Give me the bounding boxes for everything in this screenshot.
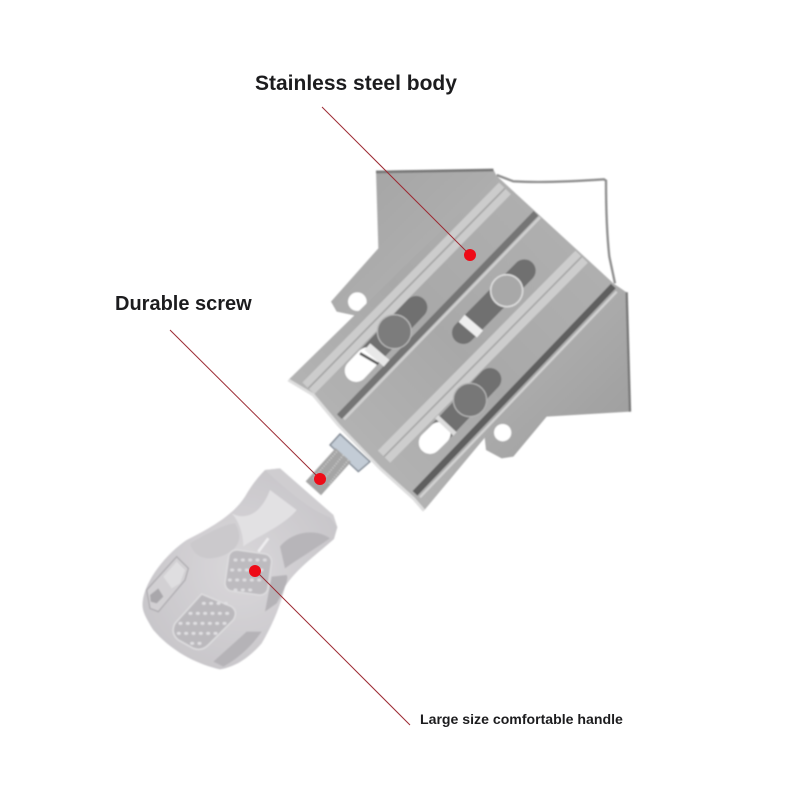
tab holes — [348, 292, 367, 311]
heading: Stainless steel body: Stainless steel body — [255, 72, 457, 95]
groove 2 — [415, 286, 613, 493]
slot 2 — [462, 271, 524, 334]
bottom grip pad — [213, 632, 262, 667]
screw heads — [377, 275, 523, 417]
grip pad lower — [173, 594, 235, 649]
heading: Large size comfortable handle: Large size comfortable handle — [420, 711, 623, 727]
slot 3 — [430, 379, 490, 443]
heading: Durable screw: Durable screw — [115, 293, 252, 315]
handle top face — [265, 468, 337, 527]
callout line: durable screw — [170, 330, 320, 479]
callout line: handle — [255, 570, 410, 725]
marker dot: handle — [249, 565, 261, 577]
groove 1 — [339, 213, 536, 417]
ridge 2 — [384, 257, 582, 457]
front edge highlight — [288, 380, 424, 511]
wire spring — [497, 175, 615, 283]
grip pad upper — [224, 549, 273, 596]
handle — [142, 468, 337, 669]
side grip pad — [265, 575, 287, 612]
handle shading — [232, 490, 297, 547]
slot 1 — [356, 307, 416, 371]
marker dot: screw — [314, 473, 326, 485]
ridge 1 — [308, 188, 505, 388]
front plate — [288, 176, 613, 511]
callout line: stainless steel body — [322, 107, 470, 255]
screw nut — [330, 434, 370, 472]
back plate — [331, 169, 630, 458]
threaded screw — [313, 455, 343, 488]
side window recess — [147, 557, 188, 612]
marker dot: body — [464, 249, 476, 261]
metal clamp body — [288, 169, 630, 511]
